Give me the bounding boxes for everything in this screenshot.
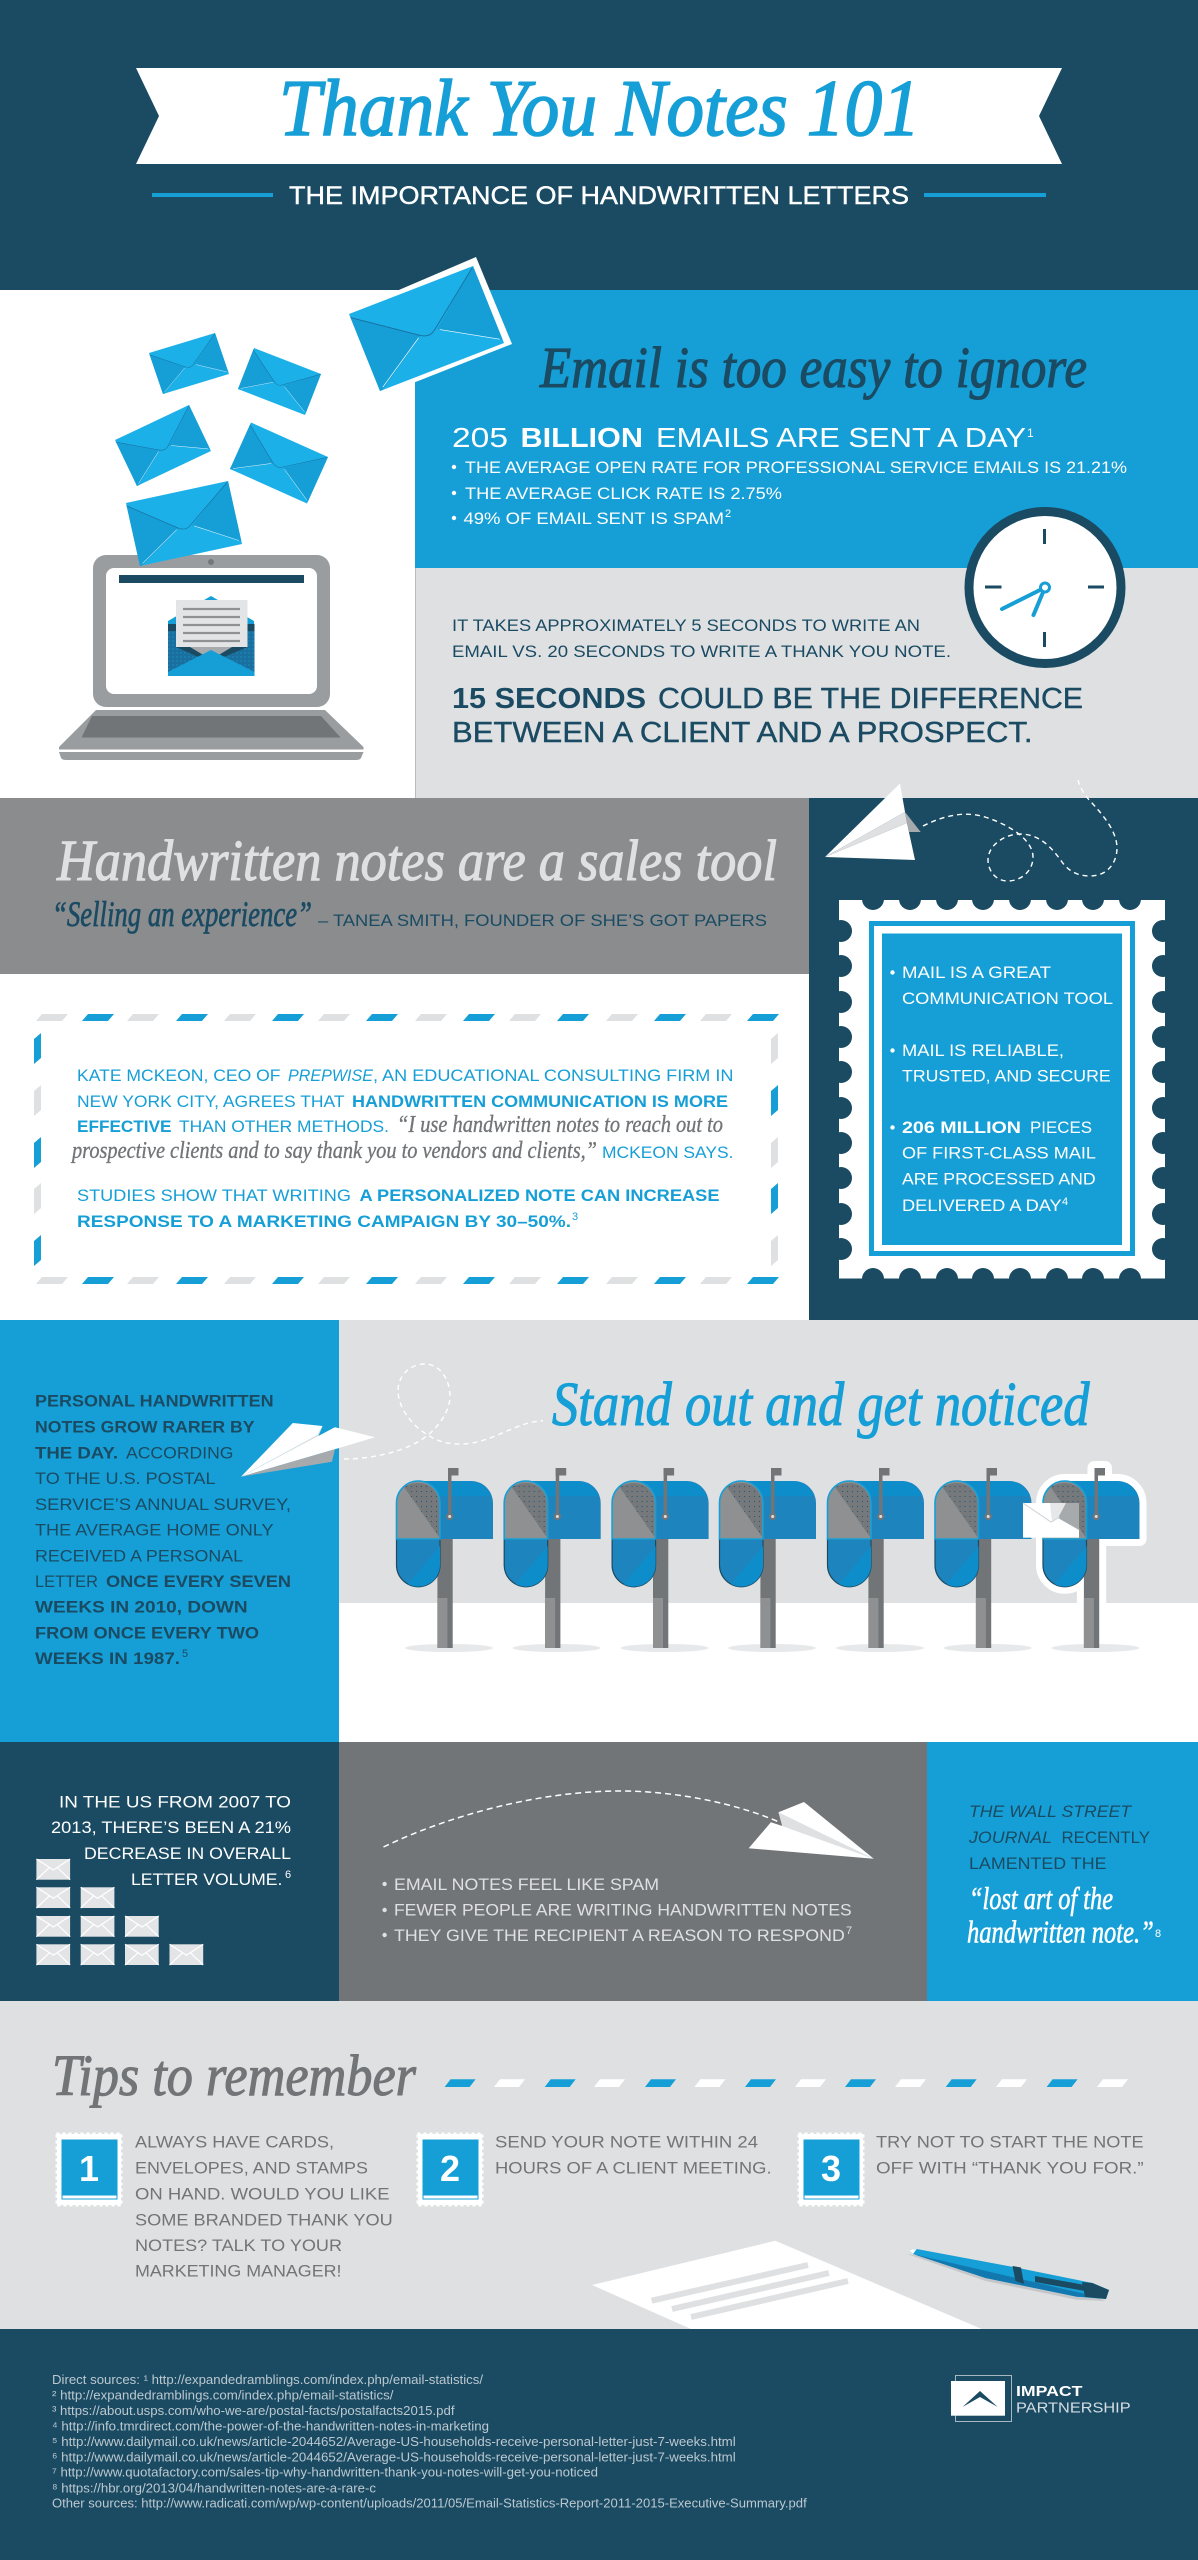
text: mail facts list: OF FIRST-CLASS MAIL (902, 1145, 1096, 1163)
callout: 15 seconds: COULD BE THE DIFFERENCE (658, 683, 1083, 715)
heading: tips to remember: Tips to remember (52, 2043, 416, 2108)
panel: why notes matter (339, 1742, 927, 2001)
text: McKeon paragraph: MCKEON SAYS. (602, 1144, 734, 1162)
text: personalized note statistic: STUDIES SHOW THAT WRITING (77, 1187, 351, 1205)
bullet list: 49% OF EMAIL SENT IS SPAM (464, 510, 724, 528)
stat: 205 billion: BILLION (520, 422, 643, 453)
quote: lost art (967, 1880, 1161, 1950)
panel: mail facts (809, 780, 1198, 1320)
stat: 205 billion (452, 422, 1034, 453)
icon: paper plane (749, 1802, 874, 1859)
text: McKeon paragraph: THAN OTHER METHODS. (179, 1118, 389, 1136)
icon: paper plane (825, 784, 921, 860)
text: McKeon paragraph: prospective clients and to say thank you to vendors and clients,” (70, 1138, 597, 1164)
text: rarer by the day: PERSONAL HANDWRITTEN (35, 1393, 274, 1411)
icon: big envelope (345, 257, 512, 396)
stat: 205 billion: 1 (1027, 426, 1034, 440)
tip 1: NOTES? TALK TO YOUR (135, 2237, 342, 2255)
text: rarer by the day: WEEKS IN 2010, DOWN (35, 1599, 248, 1617)
text: seconds to write: IT TAKES APPROXIMATELY 5 SECONDS TO WRITE AN (452, 617, 920, 635)
panel: airmail letter (0, 974, 810, 1320)
panel: handwritten notes rarer (0, 1320, 375, 1742)
tip 2: SEND YOUR NOTE WITHIN 24 (495, 2134, 758, 2152)
chart: envelope pictogram (36, 1859, 203, 1965)
tip 3: TRY NOT TO START THE NOTE (876, 2134, 1144, 2152)
callout: 15 seconds (452, 683, 1083, 749)
tip 1: ALWAYS HAVE CARDS, (135, 2134, 334, 2152)
tip 2: HOURS OF A CLIENT MEETING. (495, 2160, 772, 2178)
tip 2 (418, 2134, 772, 2206)
icon: letter going into mailbox (1023, 1503, 1079, 1538)
sources: ⁶ http://www.dailymail.co.uk/news/article-2044652/Average-US-households-receive-personal-letter-just-7-weeks.html (52, 2450, 736, 2464)
logo: Impact Partnership (951, 2376, 1131, 2422)
dashed flight path (923, 780, 1117, 881)
panel: time comparison (415, 568, 1198, 798)
text: 21% decrease (51, 1794, 291, 1889)
quote: lost art: “lost art of the (969, 1880, 1113, 1916)
text: WSJ: LAMENTED THE (969, 1855, 1106, 1873)
tip 1: MARKETING MANAGER! (135, 2263, 342, 2281)
panel: email illustration (0, 290, 416, 798)
icon: paper plane (241, 1423, 375, 1477)
text: mail facts list: 4 (1062, 1196, 1068, 1208)
bullet list: THE AVERAGE OPEN RATE FOR PROFESSIONAL SERVICE EMAILS IS 21.21% (465, 459, 1127, 477)
text: personalized note statistic: 3 (572, 1211, 578, 1223)
sources: ⁸ https://hbr.org/2013/04/handwritten-notes-are-a-rare-c (52, 2481, 376, 2495)
subtitle rule left (152, 193, 273, 197)
panel: header (0, 0, 1198, 291)
dashed flight path (384, 1791, 779, 1847)
text: mail facts list: PIECES (1030, 1119, 1092, 1137)
panel: handwritten notes heading band (0, 798, 810, 974)
title: Thank You Notes 101 (279, 65, 920, 153)
stamp (830, 888, 1174, 1290)
text: mail facts list (890, 964, 1113, 1215)
stat: 205 billion: 205 (452, 422, 508, 453)
text: WSJ: RECENTLY (1062, 1829, 1150, 1847)
text: mail facts list: COMMUNICATION TOOL (902, 990, 1113, 1008)
panel: email stats (415, 290, 1198, 568)
callout: 15 seconds: 15 SECONDS (452, 683, 646, 715)
icon: note paper (592, 2241, 982, 2329)
airmail border (34, 1014, 779, 1284)
text: mail facts list: ARE PROCESSED AND (902, 1170, 1096, 1188)
title ribbon (136, 68, 1062, 164)
text: rarer by the day (35, 1393, 291, 1668)
text: McKeon paragraph: KATE MCKEON, CEO OF (77, 1067, 280, 1085)
text: rarer by the day: 5 (182, 1648, 188, 1660)
text: personalized note statistic: A PERSONALIZED NOTE CAN INCREASE (360, 1187, 720, 1205)
sources: Direct sources: ¹ http://expandedramblings.com/index.php/email-statistics/ (52, 2373, 484, 2387)
bullet list: 2 (725, 508, 731, 520)
text: McKeon paragraph (70, 1067, 734, 1164)
dashed flight path (344, 1364, 543, 1459)
tip 3: 3 (821, 2148, 841, 2189)
text: mail facts list: 206 MILLION (902, 1119, 1021, 1137)
text: 21% decrease: IN THE US FROM 2007 TO (59, 1794, 291, 1812)
text: McKeon paragraph: HANDWRITTEN COMMUNICATION IS MORE (352, 1093, 728, 1111)
icon: laptop (59, 555, 364, 760)
text: 21% decrease: DECREASE IN OVERALL (84, 1845, 291, 1863)
tip 2: 2 (440, 2148, 460, 2189)
text: seconds to write (452, 617, 951, 661)
tip 3: OFF WITH “THANK YOU FOR.” (876, 2160, 1144, 2178)
sources: ⁴ http://info.tmrdirect.com/the-power-of-the-handwritten-notes-in-marketing (52, 2419, 489, 2433)
panel: wall street journal (927, 1742, 1198, 2001)
text: McKeon paragraph: PREPWISE (288, 1067, 374, 1085)
text: McKeon paragraph: EFFECTIVE (77, 1118, 172, 1136)
sources: ³ https://about.usps.com/who-we-are/postal-facts/postalfacts2015.pdf (52, 2404, 455, 2418)
logo: Impact Partnership: IMPACT (1016, 2383, 1082, 2400)
bullet list: EMAIL NOTES FEEL LIKE SPAM (394, 1876, 659, 1894)
bullet list (452, 459, 1127, 528)
mailboxes (396, 1468, 1140, 1652)
quote: selling an experience: “Selling an experience” (52, 894, 312, 934)
quote: lost art: 8 (1155, 1928, 1161, 1940)
heading: handwritten notes are a sales tool: Handwritten notes are a sales tool (56, 828, 777, 893)
text: seconds to write: EMAIL VS. 20 SECONDS TO WRITE A THANK YOU NOTE. (452, 643, 951, 661)
sources: Other sources: http://www.radicati.com/wp/wp-content/uploads/2011/05/Email-Statistics-Report-2011-2015-Executive-Summary.pdf (52, 2497, 807, 2511)
text: mail facts list: DELIVERED A DAY (902, 1197, 1062, 1215)
quote: selling an experience: – TANEA SMITH, FOUNDER OF SHE’S GOT PAPERS (318, 912, 767, 930)
bullet list: THE AVERAGE CLICK RATE IS 2.75% (465, 485, 782, 503)
icon: pen (907, 2249, 1109, 2301)
subtitle rule right (924, 193, 1046, 197)
text: 21% decrease: 2013, THERE’S BEEN A 21% (51, 1819, 291, 1837)
stat: 205 billion: EMAILS ARE SENT A DAY (656, 422, 1026, 453)
text: mail facts list: TRUSTED, AND SECURE (902, 1068, 1111, 1086)
tip 3 (798, 2134, 1144, 2206)
heading: email is too easy to ignore: Email is too easy to ignore (539, 335, 1087, 400)
bullet list: FEWER PEOPLE ARE WRITING HANDWRITTEN NOTES (394, 1902, 852, 1920)
sources: ⁵ http://www.dailymail.co.uk/news/article-2044652/Average-US-households-receive-personal-letter-just-7-weeks.html (52, 2435, 736, 2449)
text: rarer by the day: THE AVERAGE HOME ONLY (35, 1522, 274, 1540)
subtitle: THE IMPORTANCE OF HANDWRITTEN LETTERS (289, 182, 909, 210)
tip 1: ENVELOPES, AND STAMPS (135, 2160, 368, 2178)
text: personalized note statistic: RESPONSE TO A MARKETING CAMPAIGN BY 30–50%. (77, 1213, 571, 1231)
icon: flying envelopes (115, 333, 328, 566)
text: personalized note statistic (77, 1187, 720, 1231)
text: rarer by the day: THE DAY. (35, 1444, 118, 1462)
icon: open envelope on screen (168, 596, 254, 676)
quote: selling an experience (52, 894, 767, 934)
heading: stand out and get noticed: Stand out and get noticed (552, 1371, 1090, 1439)
text: McKeon paragraph: “I use handwritten notes to reach out to (397, 1112, 723, 1138)
text: rarer by the day: SERVICE’S ANNUAL SURVEY, (35, 1496, 291, 1514)
tip 1: SOME BRANDED THANK YOU (135, 2211, 393, 2229)
tip 1: ON HAND. WOULD YOU LIKE (135, 2185, 390, 2203)
airmail divider (445, 2079, 1128, 2087)
text: McKeon paragraph: NEW YORK CITY, AGREES THAT (77, 1093, 344, 1111)
text: rarer by the day: RECEIVED A PERSONAL (35, 1548, 243, 1566)
text: rarer by the day: NOTES GROW RARER BY (35, 1419, 255, 1437)
text: WSJ: THE WALL STREET (969, 1803, 1133, 1821)
highlight outline behind seventh mailbox (1043, 1468, 1140, 1603)
logo: Impact Partnership: PARTNERSHIP (1016, 2400, 1131, 2417)
bullet list (382, 1876, 852, 1945)
text: McKeon paragraph: , AN EDUCATIONAL CONSULTING FIRM IN (373, 1067, 734, 1085)
text: rarer by the day: WEEKS IN 1987. (35, 1650, 180, 1668)
text: 21% decrease: 6 (285, 1869, 291, 1881)
text: rarer by the day: TO THE U.S. POSTAL (35, 1470, 215, 1488)
bullet list: 7 (846, 1925, 852, 1937)
tip 1 (56, 2134, 393, 2281)
text: rarer by the day: ONCE EVERY SEVEN (106, 1573, 291, 1591)
panel: footer (0, 2329, 1198, 2560)
sources: ² http://expandedramblings.com/index.php/email-statistics/ (52, 2388, 394, 2402)
text: rarer by the day: ACCORDING (126, 1444, 234, 1462)
text: 21% decrease: LETTER VOLUME. (131, 1871, 282, 1889)
bullet list: THEY GIVE THE RECIPIENT A REASON TO RESPOND (394, 1927, 845, 1945)
sources (52, 2373, 807, 2511)
panel: stand out illustration (339, 1320, 1198, 1742)
icon: clock (969, 512, 1121, 664)
tip 1: 1 (79, 2148, 99, 2189)
panel: tips to remember (0, 2001, 1198, 2329)
sources: ⁷ http://www.quotafactory.com/sales-tip-why-handwritten-thank-you-notes-will-get-you-noticed (52, 2466, 598, 2480)
text: WSJ (968, 1803, 1150, 1873)
text: mail facts list: MAIL IS A GREAT (902, 964, 1051, 982)
text: mail facts list: MAIL IS RELIABLE, (902, 1042, 1064, 1060)
text: WSJ: JOURNAL (968, 1829, 1052, 1847)
callout: 15 seconds: BETWEEN A CLIENT AND A PROSPECT. (452, 717, 1032, 749)
text: rarer by the day: LETTER (35, 1573, 98, 1591)
panel: letter volume decrease (0, 1742, 339, 2001)
text: rarer by the day: FROM ONCE EVERY TWO (35, 1625, 259, 1643)
